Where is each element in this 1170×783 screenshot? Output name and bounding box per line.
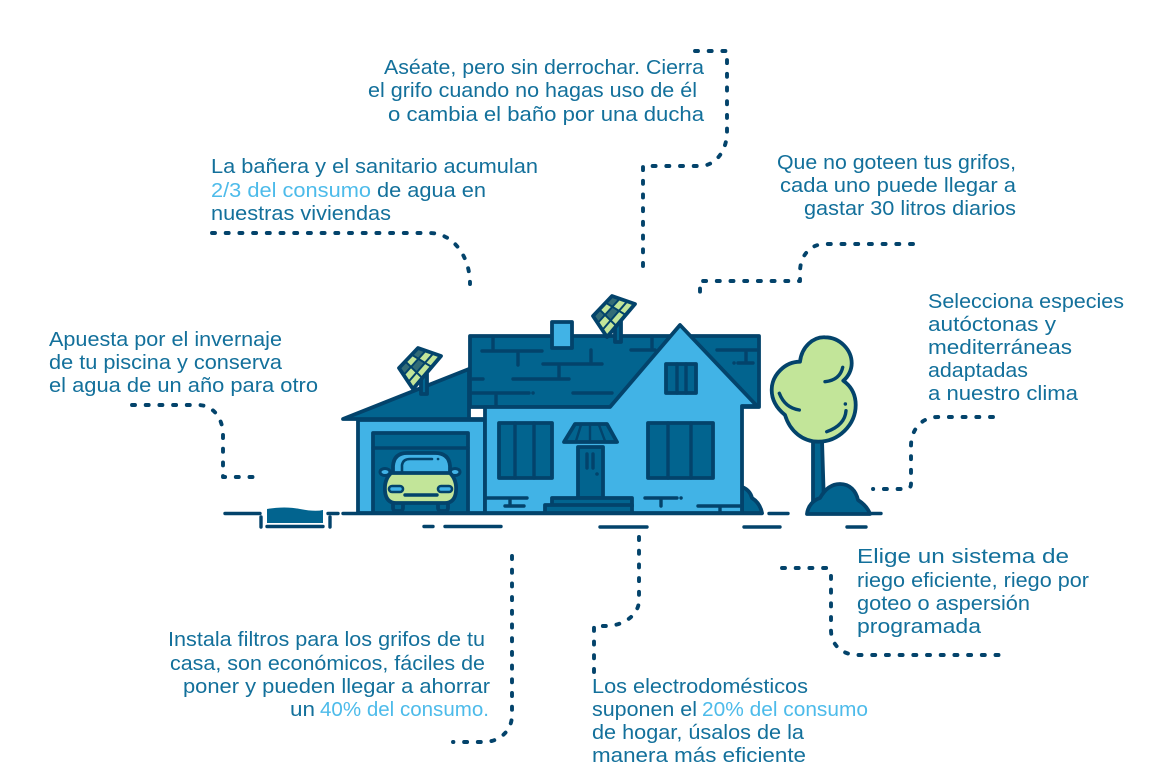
text: pool wintering: de tu piscina y conserva bbox=[49, 351, 283, 374]
text: dripping taps: Que no goteen tus grifos, bbox=[777, 151, 1016, 174]
text: efficient irrigation bbox=[857, 545, 1089, 638]
small bush behind house bbox=[742, 487, 762, 513]
text: native species: a nuestro clima bbox=[928, 382, 1079, 405]
text: appliances bbox=[592, 675, 868, 767]
chimney bbox=[552, 322, 572, 348]
dotted connector: appliances bbox=[594, 537, 639, 672]
text: bath and toilet consumption: La bañera y el sanitario acumulan bbox=[211, 155, 538, 178]
solar panel: garage roof bbox=[399, 348, 441, 394]
text: native species: mediterráneas bbox=[928, 336, 1072, 359]
text: tap filters bbox=[168, 628, 490, 721]
text: efficient irrigation: goteo o aspersión bbox=[857, 592, 1030, 615]
car bbox=[380, 453, 460, 511]
dotted connector: ducha bbox=[643, 51, 727, 268]
house illustration bbox=[225, 296, 881, 527]
text: native species: Selecciona especies bbox=[928, 290, 1124, 313]
main roof bbox=[470, 336, 759, 407]
solar panel: main roof bbox=[593, 296, 635, 342]
garage door bbox=[373, 433, 468, 513]
text: pool wintering: Apuesta por el invernaje bbox=[49, 328, 282, 351]
steps bbox=[545, 498, 632, 513]
text: dripping taps: cada uno puede llegar a bbox=[780, 174, 1017, 197]
text: dripping taps: gastar 30 litros diarios bbox=[804, 197, 1016, 220]
text: tap filters: casa, son económicos, fáciles de bbox=[170, 652, 485, 675]
text: bath and toilet consumption: 2/3 del consumo bbox=[211, 179, 371, 202]
text: appliances: 20% del consumo bbox=[702, 698, 868, 721]
text: tap filters: un bbox=[290, 698, 315, 721]
text: tap filters: 40% del consumo. bbox=[320, 698, 489, 721]
text: dripping taps bbox=[777, 151, 1017, 220]
tree bbox=[772, 337, 856, 505]
garage roof bbox=[343, 369, 485, 419]
text: ducha instead of bath: el grifo cuando no hagas uso de él bbox=[368, 79, 697, 102]
left window bbox=[499, 423, 552, 478]
door bbox=[578, 447, 603, 498]
text: appliances: suponen el bbox=[592, 698, 697, 721]
text: tap filters: Instala filtros para los grifos de tu bbox=[168, 628, 485, 651]
text: efficient irrigation: riego eficiente, riego por bbox=[857, 569, 1089, 592]
text: ducha instead of bath: o cambia el baño por una ducha bbox=[388, 103, 705, 126]
house front wall bbox=[485, 325, 757, 513]
garage body bbox=[358, 420, 485, 513]
text: appliances: de hogar, úsalos de la bbox=[592, 721, 805, 744]
text: native species: autóctonas y bbox=[928, 313, 1057, 336]
text: ducha instead of bath: Aséate, pero sin derrochar. Cierra bbox=[384, 56, 705, 79]
dotted connector: pool bbox=[132, 405, 255, 477]
text: native species: adaptadas bbox=[928, 359, 1028, 382]
dotted connector: filters bbox=[453, 556, 512, 742]
ground lines bbox=[225, 514, 881, 527]
wall bricks bbox=[487, 498, 740, 513]
text: efficient irrigation: programada bbox=[857, 615, 982, 638]
text: tap filters: poner y pueden llegar a ahorrar bbox=[183, 675, 490, 698]
dotted connector: bath bbox=[212, 233, 470, 284]
text: pool wintering bbox=[49, 328, 318, 397]
bush bbox=[807, 484, 870, 514]
attic window bbox=[666, 364, 696, 393]
text: appliances: manera más eficiente bbox=[592, 744, 806, 767]
text: bath and toilet consumption bbox=[211, 155, 538, 225]
text: appliances: Los electrodomésticos bbox=[592, 675, 808, 698]
dotted connector: irrigation bbox=[782, 568, 1009, 655]
roof bricks bbox=[472, 337, 757, 407]
text: bath and toilet consumption: nuestras viviendas bbox=[211, 202, 391, 225]
swimming pool bbox=[267, 508, 323, 523]
text: bath and toilet consumption: de agua en bbox=[377, 179, 486, 202]
text: pool wintering: el agua de un año para otro bbox=[49, 374, 318, 397]
text: native species bbox=[928, 290, 1124, 405]
right window bbox=[648, 423, 713, 478]
text: ducha instead of bath bbox=[368, 56, 705, 126]
awning bbox=[564, 424, 617, 442]
text: efficient irrigation: Elige un sistema de bbox=[857, 545, 1069, 568]
dotted connector: species bbox=[873, 417, 993, 489]
dotted connector: taps bbox=[700, 244, 913, 296]
